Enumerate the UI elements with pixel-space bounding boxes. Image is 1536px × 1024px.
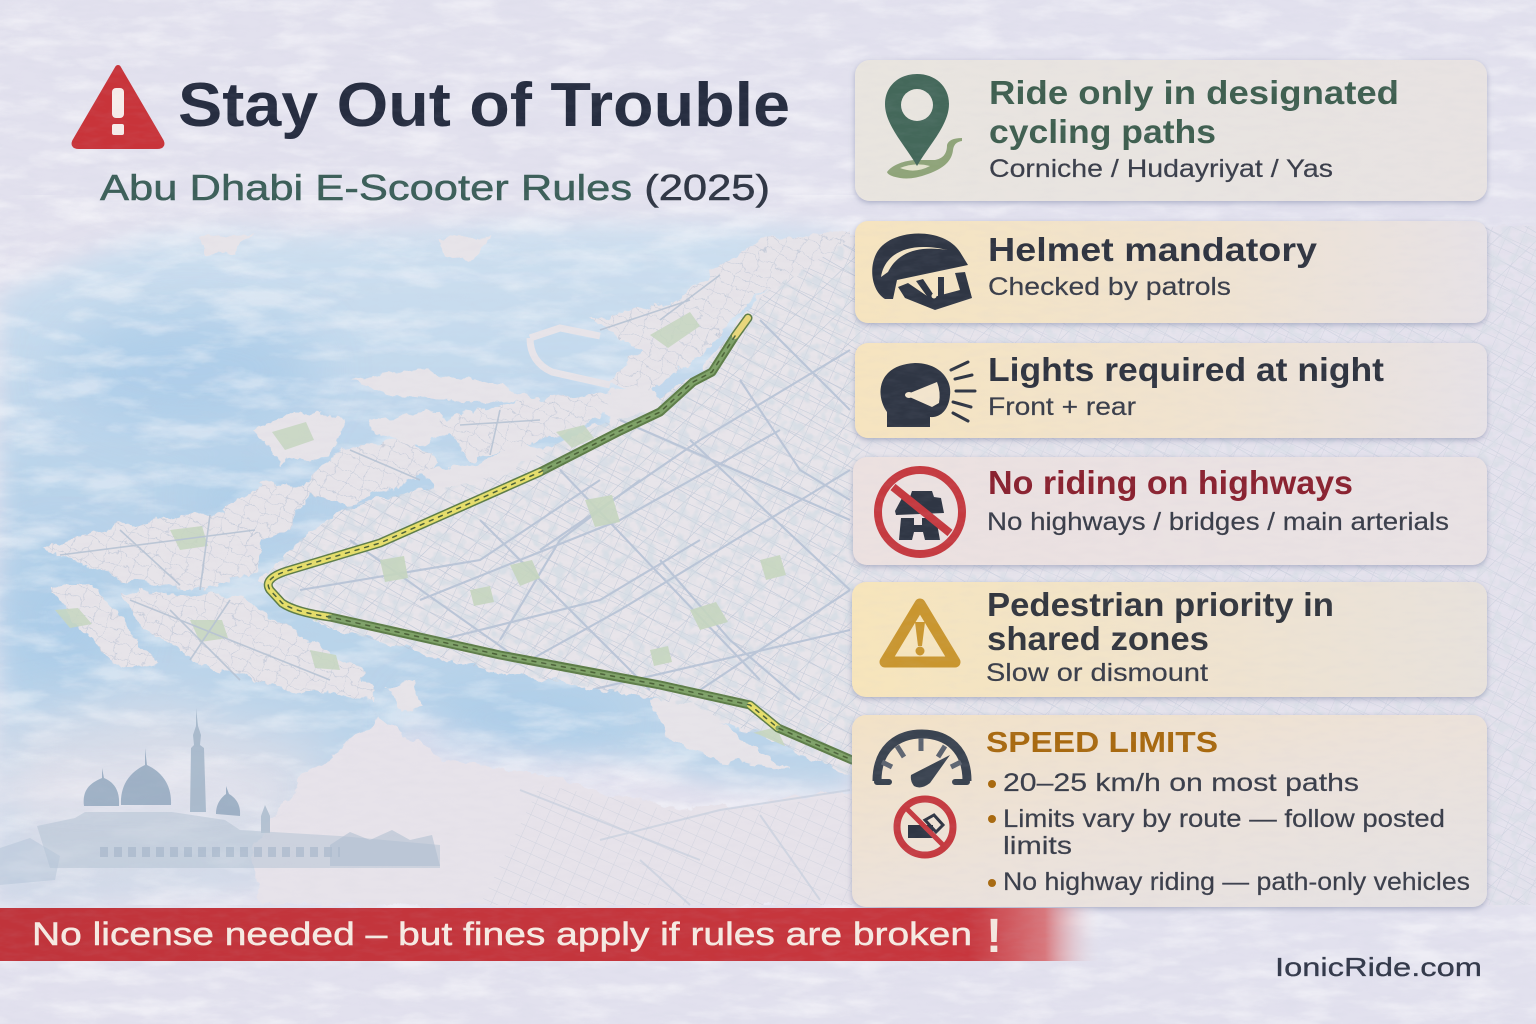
main hall xyxy=(37,812,440,868)
domes xyxy=(84,748,240,816)
route outline xyxy=(268,318,852,760)
bullet one: 20–25 km/h on most paths xyxy=(1003,769,1359,797)
map of Abu Dhabi xyxy=(0,195,1536,906)
title block xyxy=(75,68,790,208)
heading line two: shared zones xyxy=(987,620,1209,657)
yellow section north arm xyxy=(268,472,540,617)
panel: speed limits xyxy=(852,715,1487,907)
brand: IonicRide.com xyxy=(1275,952,1482,982)
fade beside panels xyxy=(860,226,1536,906)
icon: head with light xyxy=(880,362,975,427)
panel: lights xyxy=(855,343,1487,438)
banner text: No license needed – but fines apply if rules are broken xyxy=(32,916,972,952)
bullet two: Limits vary by route — follow posted xyxy=(1003,805,1445,833)
heading: Pedestrian priority in xyxy=(987,586,1334,623)
sea xyxy=(0,225,850,905)
island greenery xyxy=(55,312,700,670)
heading line two: cycling paths xyxy=(989,113,1216,150)
yellow section east xyxy=(750,705,778,728)
green cycling sections xyxy=(540,336,735,472)
detail: Slow or dismount xyxy=(986,659,1208,687)
yellow tip xyxy=(735,318,748,336)
panel: no highways xyxy=(853,457,1487,565)
icon: exclamation mark: ! xyxy=(986,910,1002,963)
island roads xyxy=(60,275,720,680)
mist over the lower left sea xyxy=(0,700,330,900)
faint distant roads xyxy=(520,790,850,905)
minaret xyxy=(190,708,206,812)
islands xyxy=(40,230,850,770)
subtitle: Abu Dhabi E-Scooter Rules (2025) xyxy=(100,167,770,208)
mainland xyxy=(262,226,1536,905)
trees xyxy=(330,830,440,866)
heading: No riding on highways xyxy=(988,464,1353,501)
lagoon ring xyxy=(530,328,610,385)
bullet two: limits xyxy=(1003,832,1072,860)
panel: helmet xyxy=(855,221,1487,323)
icon: speedometer xyxy=(877,734,967,787)
island blocks xyxy=(40,230,850,700)
bullet three: No highway riding — path-only vehicles xyxy=(1003,868,1470,896)
panel: designated paths xyxy=(855,60,1487,201)
green section east xyxy=(778,728,852,760)
footer banner xyxy=(0,908,1100,963)
haze behind mosque xyxy=(0,764,280,816)
centre dashes xyxy=(268,336,852,760)
heading: Ride only in designated xyxy=(989,74,1399,111)
icon: map pin xyxy=(885,74,962,178)
detail: Checked by patrols xyxy=(988,273,1231,301)
mosque silhouette xyxy=(0,708,440,885)
icon: no vehicle sign xyxy=(897,799,953,855)
bullet two xyxy=(988,805,1445,860)
heading: Lights required at night xyxy=(988,351,1384,388)
pale lower land xyxy=(250,718,855,905)
detail: Front + rear xyxy=(988,393,1136,421)
white clouds in the sea xyxy=(0,195,860,905)
icon: no highway sign xyxy=(878,470,962,554)
street grid xyxy=(250,226,1536,906)
green section south arm xyxy=(330,617,750,705)
parks xyxy=(290,495,786,752)
detail: No highways / bridges / main arterials xyxy=(987,508,1449,536)
heading: SPEED LIMITS xyxy=(986,727,1218,759)
icon: caution triangle xyxy=(885,604,955,662)
arcade xyxy=(100,847,340,857)
icon: warning triangle xyxy=(75,68,161,146)
lower land street texture xyxy=(480,785,855,905)
detail: Corniche / Hudayriyat / Yas xyxy=(989,155,1333,183)
shrubs xyxy=(0,838,60,885)
heading: Helmet mandatory xyxy=(988,231,1318,268)
icon: helmet xyxy=(872,233,972,310)
deeper water patches xyxy=(0,310,630,754)
small tower xyxy=(261,805,270,833)
heading: Stay Out of Trouble xyxy=(178,71,790,140)
panel: pedestrian priority xyxy=(852,582,1487,697)
route line xyxy=(268,318,852,760)
